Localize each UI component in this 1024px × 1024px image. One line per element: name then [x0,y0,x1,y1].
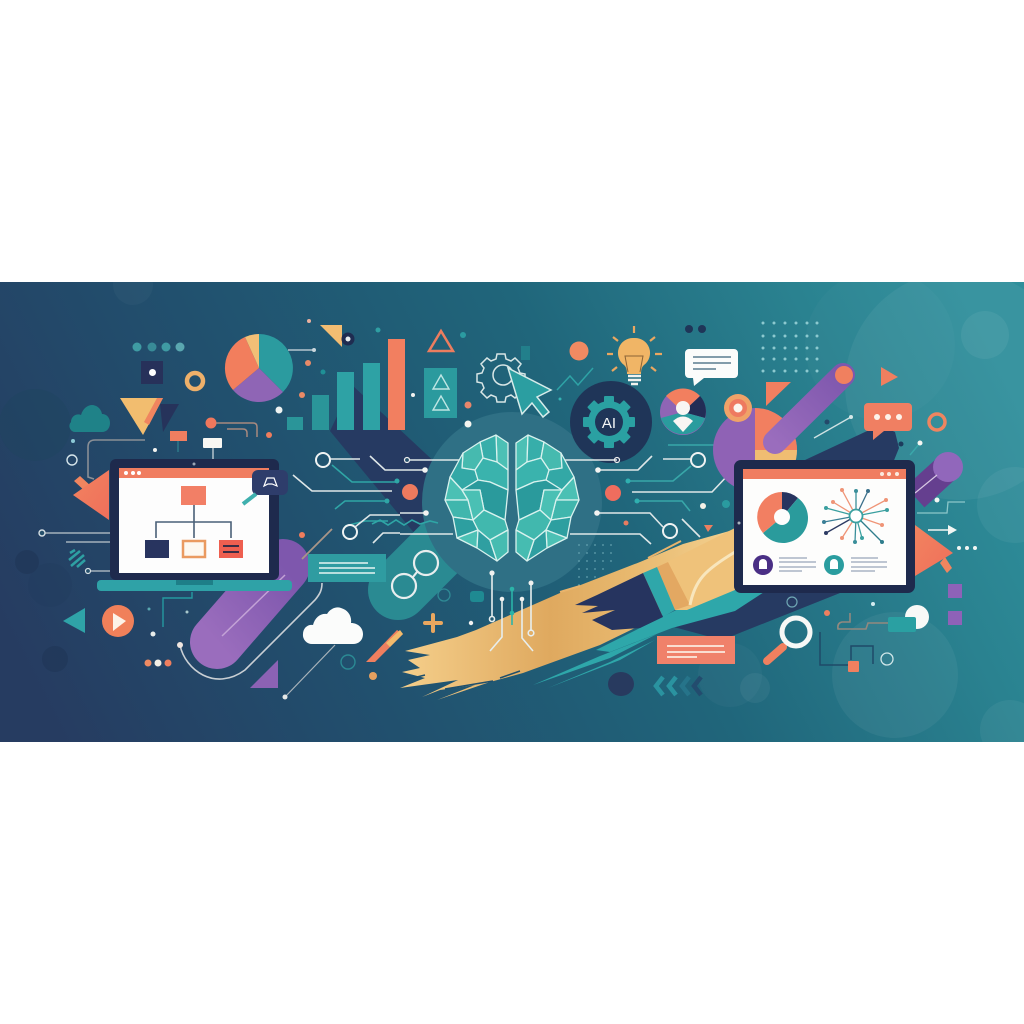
coral text card [657,636,735,664]
coral ring [929,414,945,430]
purple capsule lower left [217,566,285,642]
panel: tablet dashboard [734,460,915,593]
dotted texture near brush [578,544,612,586]
soft background bubbles [82,282,1024,742]
brush teal swoosh [533,585,775,688]
scattered dots centre top [411,332,472,428]
avatar circle [660,388,706,435]
teal cloud [69,405,110,432]
flowchart nodes above laptop [153,418,272,459]
dark diagonal band [330,387,432,532]
teal text label [308,554,386,582]
circuit node lower right [820,602,929,672]
badge on laptop [243,470,288,504]
circuit lines right of brain [565,445,730,544]
small ring under tablet [787,597,797,607]
legend rows [753,555,887,575]
arrow and wire right [917,498,977,550]
icon: play button [102,605,134,637]
circuit dots right of brain [594,467,730,532]
outlined coral triangle [429,331,453,351]
accents below chain rings [425,589,484,631]
curved wire around capsule [180,583,322,679]
purple squares [948,584,962,625]
accents near cursor [521,342,593,400]
speech bubble white [685,349,738,386]
icon: light bulb [607,326,662,384]
panel: banner background [0,265,1024,760]
navy pill behind tablet [655,425,899,640]
teal card with triangles [424,368,457,418]
pin dots [489,570,534,615]
coral arrow right [915,525,953,576]
purple capsule right [915,452,963,497]
radial network diagram [822,488,889,544]
coral arrow left [73,470,109,520]
white circuit pins [490,573,534,651]
small ring and gold dot [341,655,377,680]
icon: magnifying glass [767,618,810,661]
teal pill behind rings [398,538,450,590]
small accents around pie [276,319,380,414]
coral gold pencil [366,630,403,662]
cursor arrow [508,368,551,417]
hatched circle [69,550,85,567]
bar chart [287,339,405,430]
icon: white cloud [303,607,363,644]
wires and dots below laptop [144,592,192,666]
cloud wire [282,645,335,700]
dot grid top right [762,322,818,372]
purple triangle [250,660,278,688]
purple and coral circle cluster [713,366,853,492]
gold triangle with shadow [120,398,179,435]
speech bubble coral [864,403,912,440]
left hemisphere [445,435,508,561]
flowchart diagram [145,486,243,558]
left wires [39,440,145,574]
panel: laptop with flowchart [97,459,292,591]
coral triangle pointer [881,367,898,386]
AI gear badge: AI [602,415,616,432]
dark background dots [20,550,38,572]
gold brush stroke [400,530,733,700]
icon: paint brush [575,528,735,630]
navy blob and chevrons [608,672,701,696]
teal triangle left [63,608,85,633]
circuit lines left of brain [293,453,460,543]
circuit dots left of brain [299,458,429,559]
chain rings [392,551,438,598]
pie chart [225,334,293,402]
right hemisphere [516,435,579,561]
gold ring [187,373,203,389]
icon: polygon brain [445,435,579,561]
small line accents right [814,415,922,455]
left top cluster: dots [132,342,184,352]
brain halo circle [422,412,602,592]
gear outline [477,354,525,402]
AI gear badge [570,381,652,463]
navy square with dot [141,361,163,384]
navy dots top [685,325,706,333]
donut chart [757,492,808,543]
